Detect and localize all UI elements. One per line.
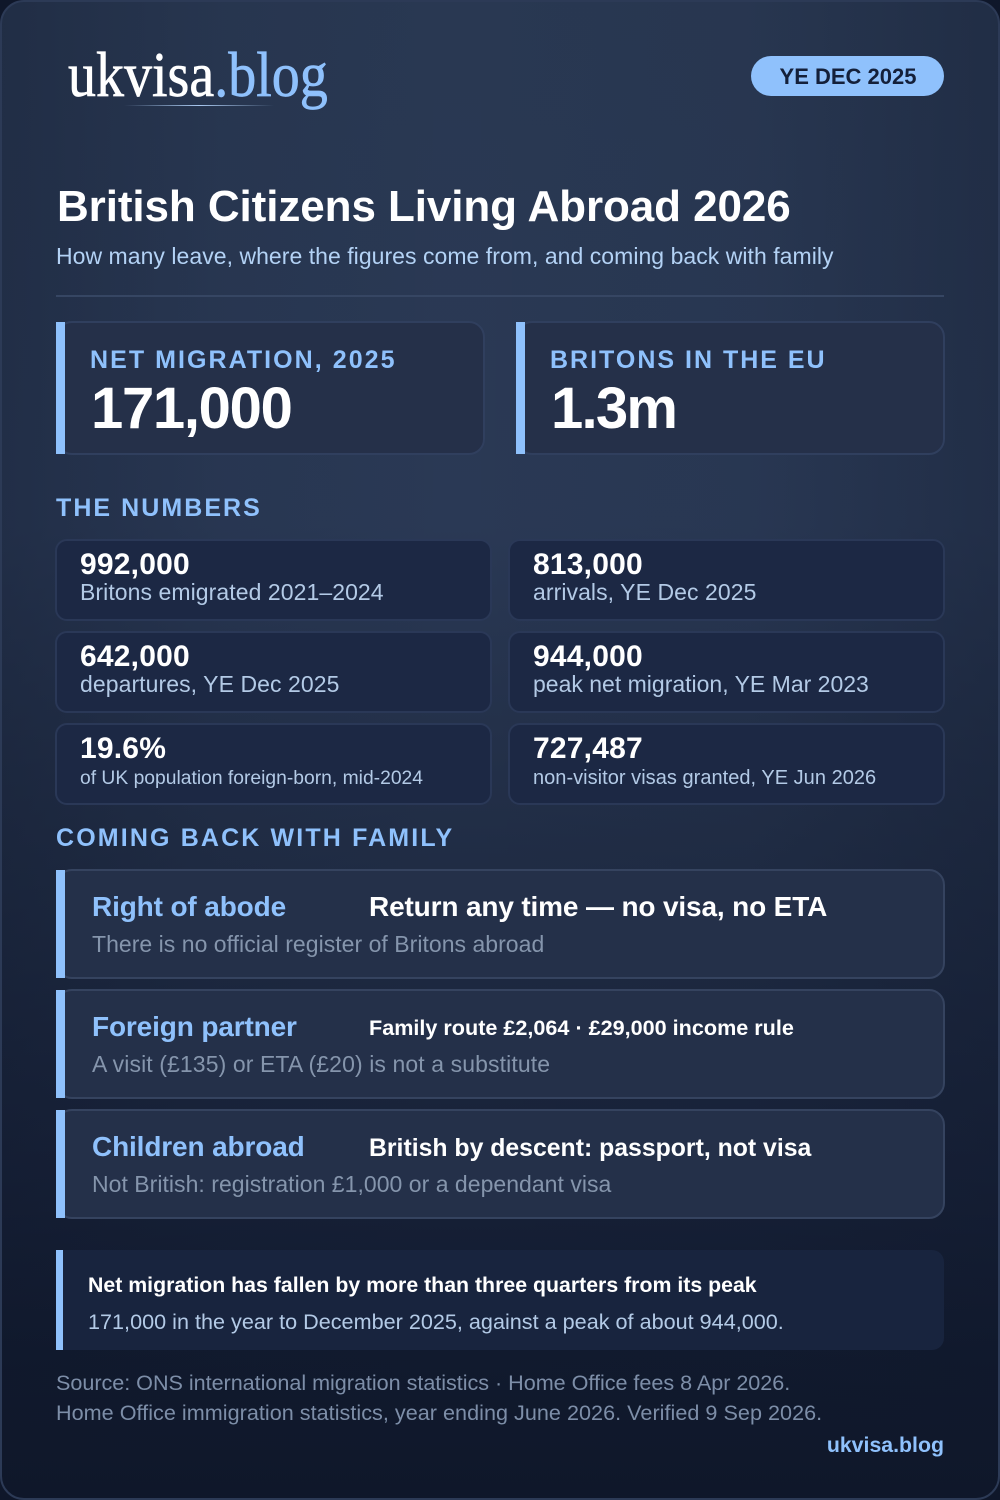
source note: Home Office immigration statistics, year ending June 2026. Verified 9 Sep 2026. — [56, 1400, 822, 1425]
hero stat: net migration: 171,000 — [91, 376, 292, 441]
row: children abroad: British by descent: passport, not visa — [369, 1135, 811, 1162]
logo: ukvisa.blog: ukvisa.blog — [68, 39, 328, 110]
row: children abroad — [56, 1109, 945, 1219]
hero stat: Britons in the EU — [516, 321, 945, 455]
stat: 813,000: arrivals, YE Dec 2025 — [533, 579, 756, 605]
title: British Citizens Living Abroad 2026 — [57, 182, 791, 231]
callout: Net migration has fallen by more than three quarters from its peak — [88, 1273, 757, 1297]
section heading: coming back with family: COMING BACK WITH FAMILY — [56, 824, 454, 852]
hero stat: Britons in the EU: BRITONS IN THE EU — [550, 346, 827, 374]
stat: 727,487: 727,487 — [533, 732, 643, 765]
row: foreign partner: Foreign partner — [92, 1011, 297, 1042]
stat: 813,000 — [508, 539, 945, 621]
section heading: the numbers: THE NUMBERS — [56, 494, 262, 522]
row: right of abode: Return any time — no visa, no ETA — [369, 891, 827, 922]
row: foreign partner: A visit (£135) or ETA (£20) is not a substitute — [92, 1051, 550, 1077]
stat: 727,487: non-visitor visas granted, YE Jun 2026 — [533, 767, 876, 789]
row: right of abode — [56, 869, 945, 979]
stat: 813,000: 813,000 — [533, 548, 643, 581]
stat: 944,000: peak net migration, YE Mar 2023 — [533, 671, 869, 697]
row: foreign partner — [56, 989, 945, 1099]
source note: Source: ONS international migration statistics · Home Office fees 8 Apr 2026. — [56, 1370, 790, 1395]
row: right of abode: Right of abode — [92, 891, 286, 922]
stat: 992,000: Britons emigrated 2021–2024 — [80, 579, 384, 605]
row: children abroad: Children abroad — [92, 1131, 305, 1162]
period badge — [751, 56, 944, 96]
stat: 992,000: 992,000 — [80, 548, 190, 581]
stat: 992,000 — [55, 539, 492, 621]
hero stat: Britons in the EU: 1.3m — [551, 376, 676, 441]
stat: 642,000: 642,000 — [80, 640, 190, 673]
hero stat: net migration: NET MIGRATION, 2025 — [90, 346, 397, 374]
stat: 944,000: 944,000 — [533, 640, 643, 673]
hero stat: net migration — [56, 321, 485, 455]
logo underline — [124, 105, 274, 106]
callout — [56, 1250, 944, 1350]
row: foreign partner: Family route £2,064 · £29,000 income rule — [369, 1015, 794, 1040]
row: right of abode: There is no official register of Britons abroad — [92, 931, 544, 957]
stat: 19.6%: 19.6% — [80, 732, 166, 765]
row: children abroad: Not British: registration £1,000 or a dependant visa — [92, 1171, 611, 1197]
stat: 19.6% — [55, 723, 492, 805]
header divider — [56, 295, 944, 297]
callout: 171,000 in the year to December 2025, against a peak of about 944,000. — [88, 1309, 784, 1334]
stat: 727,487 — [508, 723, 945, 805]
stat: 944,000 — [508, 631, 945, 713]
stat: 642,000: departures, YE Dec 2025 — [80, 671, 339, 697]
footer brand: ukvisa.blog — [827, 1433, 944, 1457]
source note — [56, 1370, 822, 1425]
period badge: YE DEC 2025 — [780, 64, 916, 89]
stat: 642,000 — [55, 631, 492, 713]
stat: 19.6%: of UK population foreign-born, mid-2024 — [80, 768, 423, 789]
subtitle: How many leave, where the figures come from, and coming back with family — [56, 243, 834, 269]
